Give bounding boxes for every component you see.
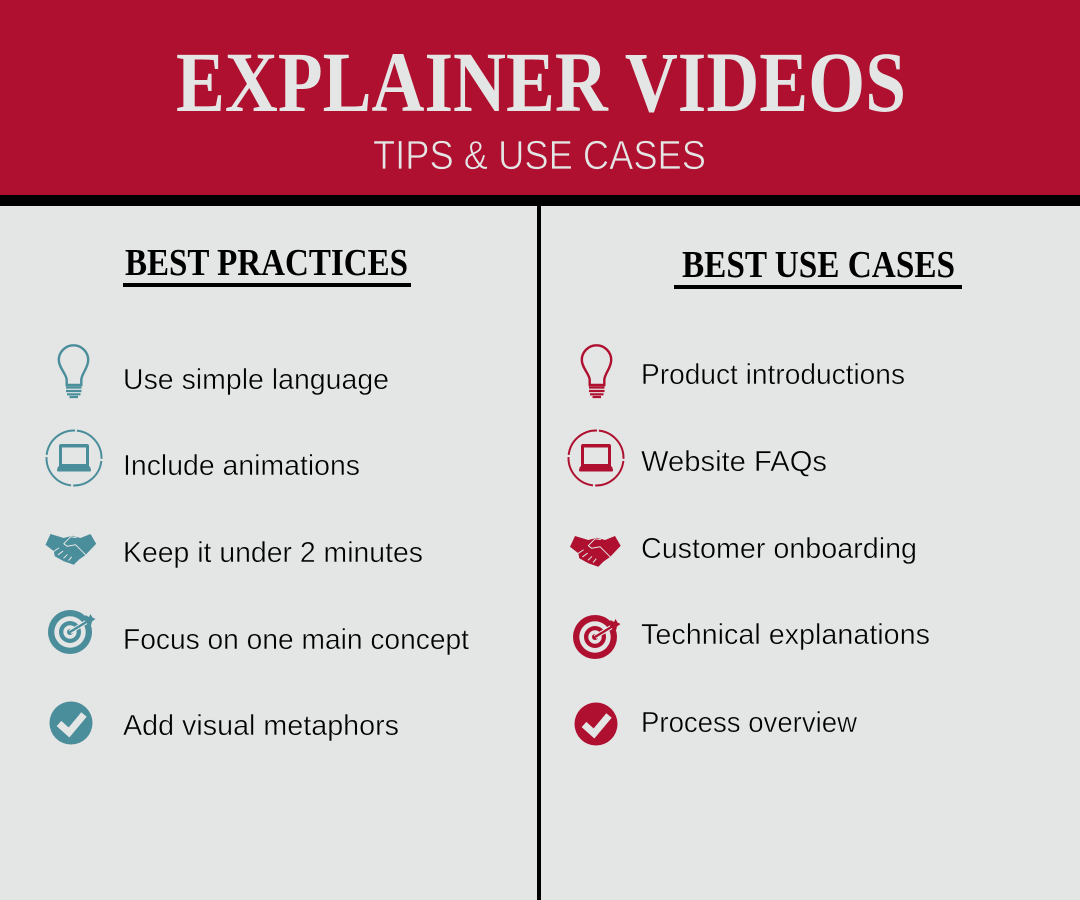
header banner [0, 0, 1080, 206]
item: customer onboarding: Customer onboarding [641, 533, 917, 565]
item: add visual metaphors: Add visual metaphors [123, 710, 399, 742]
item: focus on one main concept [48, 610, 469, 656]
subtitle: TIPS & USE CASES [373, 132, 706, 178]
item: product introductions [582, 345, 905, 397]
item: include animations: Include animations [123, 450, 360, 482]
item: process overview [574, 702, 858, 746]
item: include animations [44, 428, 360, 488]
item: add visual metaphors [50, 702, 399, 744]
item: use simple language [59, 345, 389, 397]
item: keep it under 2 minutes: Keep it under 2 minutes [123, 537, 423, 569]
heading: best practices: BEST PRACTICES [125, 242, 408, 284]
panel: best practices [44, 242, 469, 744]
panel: best use cases [566, 244, 962, 746]
item: focus on one main concept: Focus on one main concept [123, 624, 469, 656]
item: website faqs: Website FAQs [641, 446, 827, 478]
column divider [537, 206, 541, 900]
item: technical explanations [573, 615, 930, 659]
item: process overview: Process overview [641, 707, 858, 739]
item: use simple language: Use simple language [123, 364, 389, 396]
title: EXPLAINER VIDEOS [176, 34, 906, 130]
item: technical explanations: Technical explanations [641, 619, 930, 651]
item: product introductions: Product introductions [641, 359, 905, 391]
heading: best use cases: BEST USE CASES [682, 244, 955, 286]
item: website faqs [566, 428, 827, 488]
